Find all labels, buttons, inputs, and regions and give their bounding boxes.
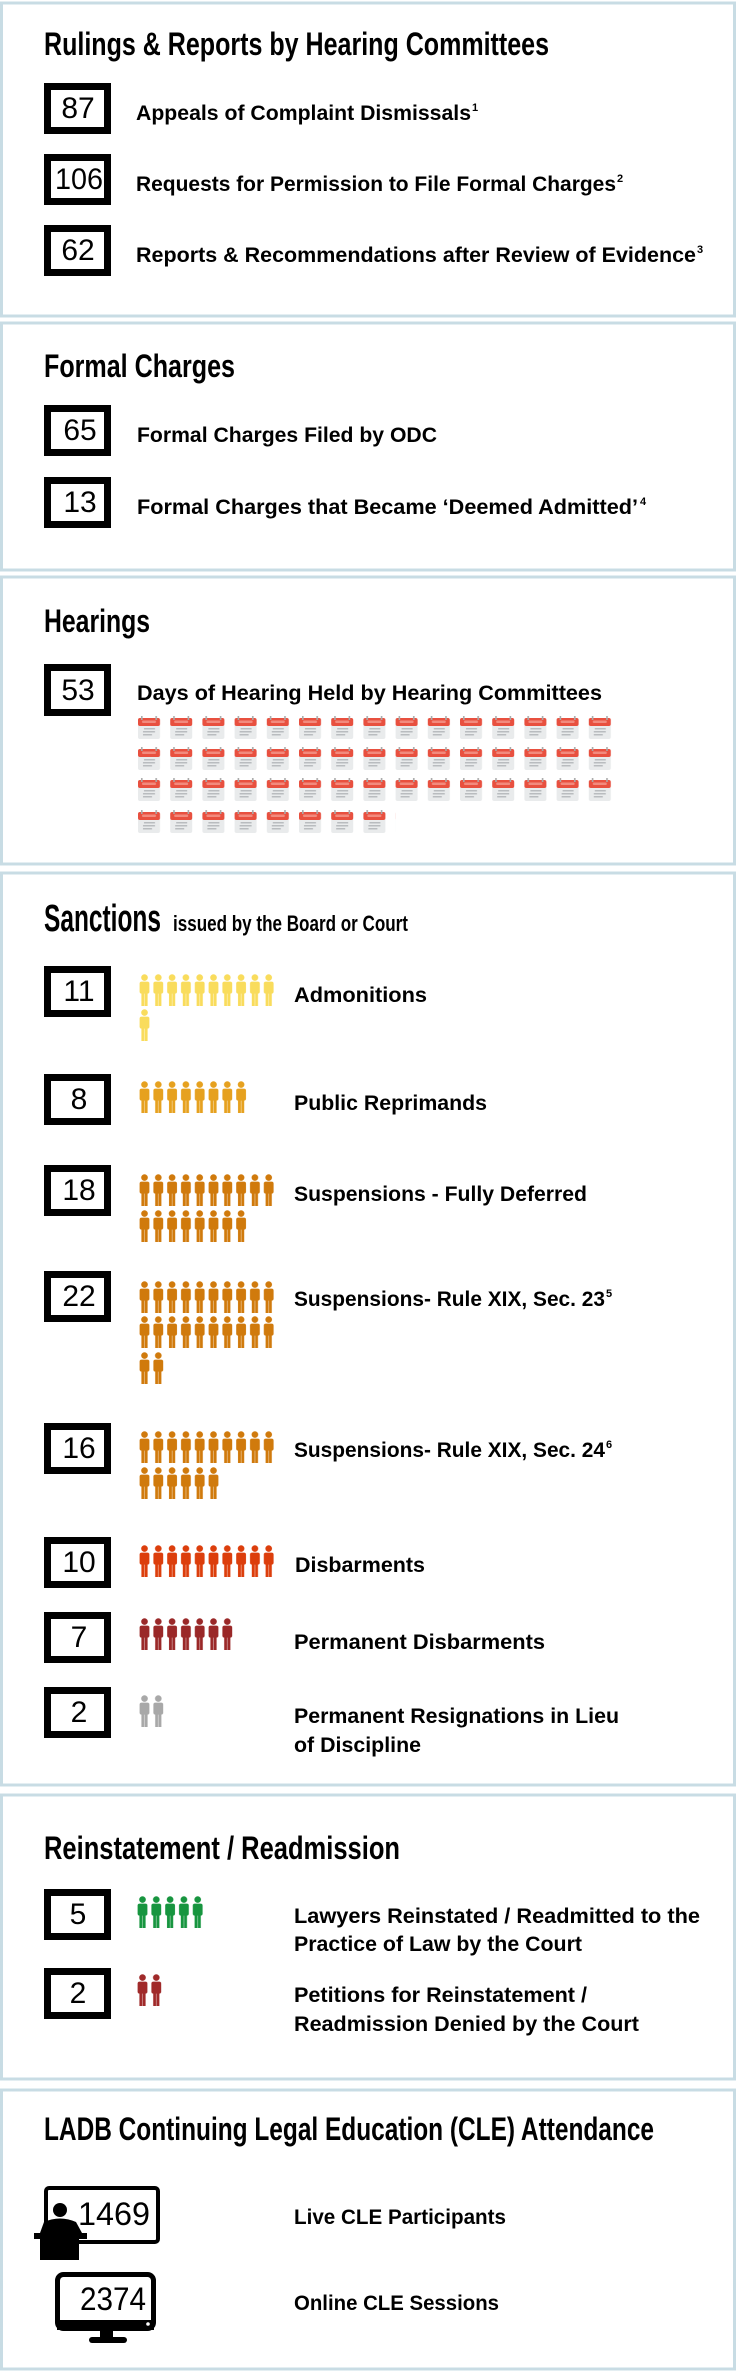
panel: formal charges xyxy=(2,323,734,570)
stat: 106 requests: 2 xyxy=(617,173,623,185)
icon: online monitor: 2374 xyxy=(80,2281,146,2317)
stat: 8 public reprimands xyxy=(48,1078,487,1122)
stat: 10 disbarments: Disbarments xyxy=(295,1554,425,1577)
panel: hearings xyxy=(2,577,734,864)
stat: 22 suspensions sec 23: 22 xyxy=(62,1280,96,1313)
stat: 18 suspensions fully deferred: 18 xyxy=(62,1174,96,1207)
stat: 65 filed: Formal Charges Filed by ODC xyxy=(137,424,437,447)
icon: live presenter screen: 1469 xyxy=(78,2196,150,2232)
stat: 62 reports: 62 xyxy=(61,234,95,267)
stat: 8 public reprimands: Public Reprimands xyxy=(294,1092,487,1115)
stat: 18 suspensions fully deferred: Suspensions - Fully Deferred xyxy=(294,1183,587,1206)
stat: 16 suspensions sec 24: Suspensions- Rule XIX, Sec. 24 xyxy=(294,1439,605,1462)
icon: live presenter screen xyxy=(34,2188,158,2260)
stat: 2 permanent resignations xyxy=(48,1690,619,1757)
stat: 62 reports: 3 xyxy=(697,244,703,256)
stat: 2 denied: 2 xyxy=(70,1977,86,2010)
stat: 22 suspensions sec 23: 5 xyxy=(606,1288,612,1300)
panel: CLE attendance xyxy=(2,2090,734,2369)
stat: 5 reinstated: Practice of Law by the Court xyxy=(294,1933,582,1956)
stat: 10 disbarments xyxy=(48,1540,425,1584)
stat: 53 days: 53 xyxy=(61,674,95,707)
panel: rulings & reports xyxy=(2,3,734,316)
heading: sanctions xyxy=(44,898,409,940)
stat: 2 permanent resignations: 2 xyxy=(71,1696,87,1729)
heading: reinstatement: Reinstatement / Readmission xyxy=(44,1830,400,1866)
text: live CLE: Live CLE Participants xyxy=(294,2206,506,2229)
icons: calendars (53) xyxy=(138,716,621,834)
stat: 87 appeals: 87 xyxy=(61,92,95,125)
stat: 2 permanent resignations: of Discipline xyxy=(294,1734,421,1757)
stat: 2 denied xyxy=(48,1972,639,2036)
heading: sanctions: issued by the Board or Court xyxy=(173,911,409,936)
stat: 106 requests xyxy=(48,158,623,202)
stat: 65 filed: 65 xyxy=(63,414,97,447)
stat: 11 admonitions xyxy=(48,970,427,1041)
stat: 5 reinstated: Lawyers Reinstated / Readmitted to the xyxy=(294,1905,700,1928)
stat: 18 suspensions fully deferred xyxy=(48,1168,587,1242)
stat: 16 suspensions sec 24 xyxy=(48,1426,612,1499)
icon: online monitor xyxy=(57,2274,154,2343)
stat: 2 permanent resignations: Permanent Resignations in Lieu xyxy=(294,1705,619,1728)
stat: 22 suspensions sec 23 xyxy=(48,1274,612,1384)
stat: 2 denied: Petitions for Reinstatement / xyxy=(294,1984,587,2007)
stat: 11 admonitions: Admonitions xyxy=(294,984,427,1007)
text: online CLE: Online CLE Sessions xyxy=(294,2292,499,2315)
stat: 13 deemed admitted: 4 xyxy=(640,496,647,508)
stat: 10 disbarments: 10 xyxy=(62,1546,96,1579)
stat: 5 reinstated: 5 xyxy=(70,1898,86,1931)
stat: 16 suspensions sec 24: 6 xyxy=(606,1439,612,1451)
stat: 7 permanent disbarments: Permanent Disbarments xyxy=(294,1631,545,1654)
stat: 7 permanent disbarments xyxy=(48,1616,545,1660)
stat: 13 deemed admitted: 13 xyxy=(63,486,97,519)
stat: 87 appeals xyxy=(48,86,478,130)
stat: 106 requests: 106 xyxy=(55,163,103,196)
stat: 7 permanent disbarments: 7 xyxy=(71,1621,87,1654)
stat: 62 reports: Reports & Recommendations after Review of Evidence xyxy=(136,244,696,267)
stat: 87 appeals: Appeals of Complaint Dismissals xyxy=(136,102,471,125)
heading: sanctions: Sanctions xyxy=(44,898,161,940)
stat: 5 reinstated xyxy=(48,1892,700,1956)
stat: 53 days xyxy=(48,668,602,712)
stat: 13 deemed admitted xyxy=(48,480,647,524)
heading: rulings: Rulings & Reports by Hearing Committees xyxy=(44,26,549,62)
stat: 11 admonitions: 11 xyxy=(63,975,95,1008)
stat: 62 reports xyxy=(48,228,703,272)
stat: 2 denied: Readmission Denied by the Court xyxy=(294,2013,639,2036)
stat: 87 appeals: 1 xyxy=(472,102,478,114)
heading: hearings: Hearings xyxy=(44,603,150,639)
heading: formal charges: Formal Charges xyxy=(44,348,235,384)
stat: 106 requests: Requests for Permission to File Formal Charges xyxy=(136,173,616,196)
stat: 8 public reprimands: 8 xyxy=(71,1083,87,1116)
stat: 13 deemed admitted: Formal Charges that Became ‘Deemed Admitted’ xyxy=(137,496,638,519)
stat: 16 suspensions sec 24: 16 xyxy=(62,1432,96,1465)
stat: 22 suspensions sec 23: Suspensions- Rule XIX, Sec. 23 xyxy=(294,1288,605,1311)
panel: sanctions xyxy=(2,873,734,1785)
stat: 65 filed xyxy=(48,408,437,452)
stat: 53 days: Days of Hearing Held by Hearing Committees xyxy=(137,682,602,705)
panel: reinstatement xyxy=(2,1795,734,2079)
